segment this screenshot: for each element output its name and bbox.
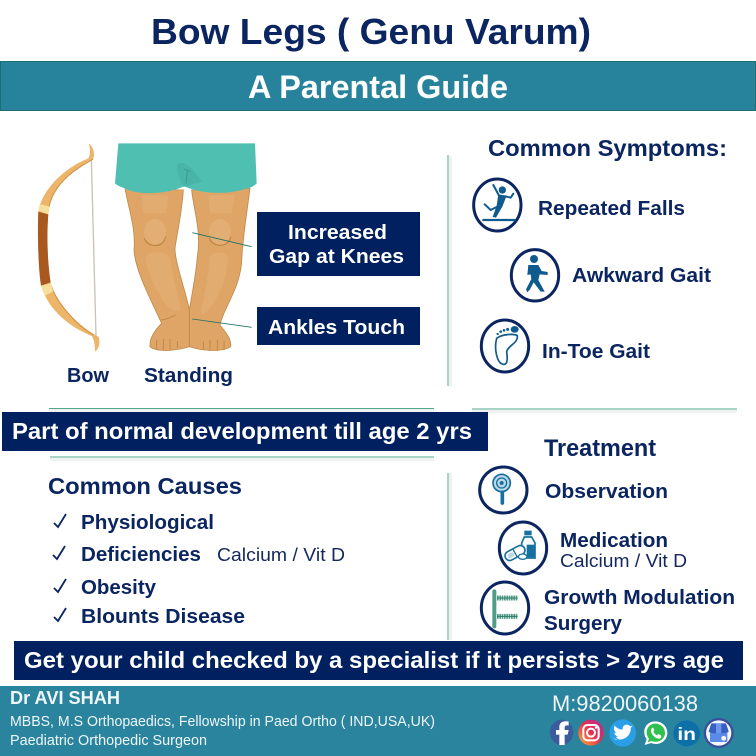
doctor qualifications: MBBS, M.S Orthopaedics, Fellowship in Paed Ortho ( IND,USA,UK): [10, 713, 435, 730]
text: in-toe gait: In-Toe Gait: [542, 341, 650, 363]
banner: normal development: [2, 412, 488, 451]
icon: magnifying glass: [480, 467, 527, 513]
icon: foot: [481, 320, 529, 372]
text: repeated falls: Repeated Falls: [538, 198, 685, 220]
icon: facebook: [550, 720, 573, 745]
subtitle banner: A Parental Guide: [248, 69, 508, 105]
icon: google my business: [704, 718, 734, 748]
text: medication: Medication: [560, 530, 668, 552]
subtitle banner: [0, 62, 756, 110]
note: calcium and vitamin d: Calcium / Vit D: [560, 551, 687, 571]
banner: normal development: Part of normal development till age 2 yrs: [12, 418, 472, 444]
callout: increased gap at knees: Gap at Knees: [269, 246, 404, 268]
illustration: bowed legs with shorts: [115, 143, 257, 351]
cause: obesity: Obesity: [81, 577, 157, 599]
checkmarks: [53, 514, 66, 621]
note: calcium and vitamin d: Calcium / Vit D: [217, 545, 345, 565]
icon: surgical screws: [481, 582, 529, 634]
banner: specialist advice: [14, 641, 743, 680]
icon: falling person: [474, 179, 521, 231]
title: Bow Legs ( Genu Varum): [151, 11, 591, 52]
banner: specialist advice: Get your child checked by a specialist if it persists > 2yrs age: [24, 647, 724, 673]
callout: ankles touch: Ankles Touch: [268, 317, 405, 339]
icon: whatsapp: [644, 721, 667, 745]
callout: ankles touch: [257, 307, 420, 345]
icon: walking person: [511, 250, 559, 301]
text: growth modulation surgery: Surgery: [544, 613, 623, 635]
text: awkward gait: Awkward Gait: [572, 265, 711, 287]
text: growth modulation surgery: Growth Modulation: [544, 587, 735, 609]
icon: twitter: [609, 719, 636, 747]
cause: blounts disease: Blounts Disease: [81, 606, 245, 628]
illustration: bow: [38, 143, 99, 352]
footer: [0, 686, 756, 756]
doctor name: Dr AVI SHAH: [10, 688, 120, 708]
callout: increased gap at knees: Increased: [288, 222, 387, 244]
panel: treatment: [480, 435, 735, 635]
panel: common symptoms: [474, 135, 727, 372]
phone number: M:9820060138: [552, 691, 698, 716]
icon: linkedin: in: [677, 724, 696, 744]
icon: linkedin: [673, 720, 700, 746]
social icons: [550, 718, 734, 748]
heading: common causes: Common Causes: [48, 473, 242, 499]
cause: deficiencies: Deficiencies: [81, 544, 201, 566]
heading: treatment: Treatment: [544, 435, 656, 462]
cause: physiological: Physiological: [81, 512, 214, 534]
text: observation: Observation: [545, 481, 668, 503]
icon: medication bottle and pills: [499, 522, 547, 574]
callout: increased gap at knees: [257, 212, 420, 276]
icon: instagram: [578, 720, 604, 746]
label: standing: Standing: [144, 365, 233, 387]
text: growth modulation surgery: [544, 587, 735, 635]
label: bow: Bow: [67, 365, 109, 387]
doctor speciality: Paediatric Orthopedic Surgeon: [10, 732, 207, 749]
panel: common causes: [48, 473, 345, 628]
heading: common symptoms: Common Symptoms:: [488, 135, 727, 161]
